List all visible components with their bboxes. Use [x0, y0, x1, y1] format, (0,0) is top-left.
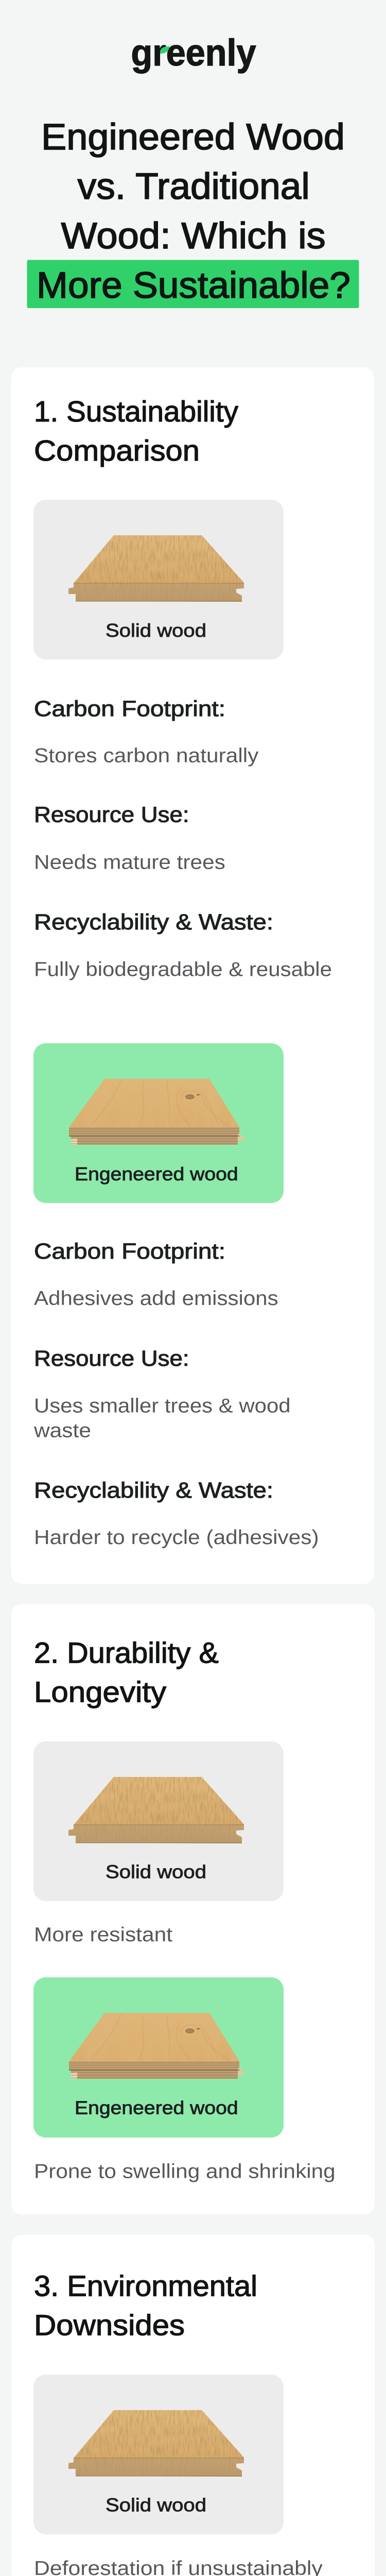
panel: 2. durability and longevity	[11, 1604, 375, 2214]
heading: sustainability comparison: 1. Sustainability	[34, 395, 238, 428]
card: solid wood	[33, 2375, 284, 2534]
card: solid wood	[33, 1741, 284, 1901]
heading: durability and longevity: 2. Durability &	[34, 1637, 219, 1670]
panel: 1. sustainability comparison	[11, 367, 374, 1584]
engineered wood: recyclability and waste: Harder to recycle (adhesives)	[34, 1527, 319, 1549]
card: solid wood: Solid wood	[106, 1861, 206, 1883]
text: solid wood durability: More resistant	[34, 1924, 172, 1946]
heading: environmental downsides: 3. Environmental	[34, 2270, 257, 2303]
solid wood: carbon footprint	[34, 697, 259, 767]
card: solid wood: Solid wood	[106, 620, 206, 641]
title: Engineered Wood	[41, 117, 345, 158]
solid wood: resource use: Needs mature trees	[34, 851, 225, 874]
title	[27, 117, 359, 308]
engineered wood: resource use: waste	[33, 1420, 91, 1442]
solid wood: recyclability and waste	[34, 910, 332, 981]
card: solid wood: Solid wood	[106, 2495, 206, 2515]
card: engineered wood	[33, 1043, 284, 1203]
card: engineered wood: Engeneered wood	[75, 1163, 238, 1184]
heading: sustainability comparison	[34, 395, 238, 467]
title highlight	[27, 260, 359, 308]
title: vs. Traditional	[78, 166, 310, 207]
card: solid wood	[33, 500, 284, 659]
heading: environmental downsides: Downsides	[34, 2309, 185, 2342]
card: engineered wood	[33, 1977, 284, 2138]
engineered wood: resource use: Resource Use:	[34, 1346, 189, 1371]
solid wood: carbon footprint: Stores carbon naturally	[34, 745, 259, 767]
text: engineered wood durability: Prone to swelling and shrinking	[34, 2161, 336, 2183]
heading: durability and longevity: Longevity	[34, 1676, 167, 1709]
engineered wood: recyclability and waste: Recyclability & Waste:	[34, 1478, 273, 1503]
logo: greenly: greenly	[131, 32, 256, 74]
heading: durability and longevity	[34, 1637, 219, 1709]
engineered wood: recyclability and waste	[34, 1478, 319, 1549]
solid wood: recyclability and waste: Recyclability & Waste:	[34, 910, 273, 935]
engineered wood: carbon footprint: Adhesives add emissions	[34, 1287, 278, 1310]
engineered wood: carbon footprint	[34, 1239, 278, 1310]
solid wood: resource use	[34, 803, 225, 874]
solid wood: resource use: Resource Use:	[34, 803, 189, 827]
title: Wood: Which is	[61, 216, 326, 257]
solid wood: recyclability and waste: Fully biodegradable & reusable	[34, 958, 332, 981]
engineered wood: carbon footprint: Carbon Footprint:	[34, 1239, 225, 1264]
heading: sustainability comparison: Comparison	[34, 434, 200, 467]
engineered wood: resource use	[33, 1346, 291, 1442]
engineered wood: resource use: Uses smaller trees & wood	[34, 1395, 291, 1417]
panel: 3. environmental downsides	[11, 2235, 375, 2576]
heading: environmental downsides	[34, 2270, 257, 2342]
card: engineered wood: Engeneered wood	[75, 2097, 238, 2119]
title: More Sustainable?	[37, 265, 350, 306]
solid wood: carbon footprint: Carbon Footprint:	[34, 697, 225, 721]
